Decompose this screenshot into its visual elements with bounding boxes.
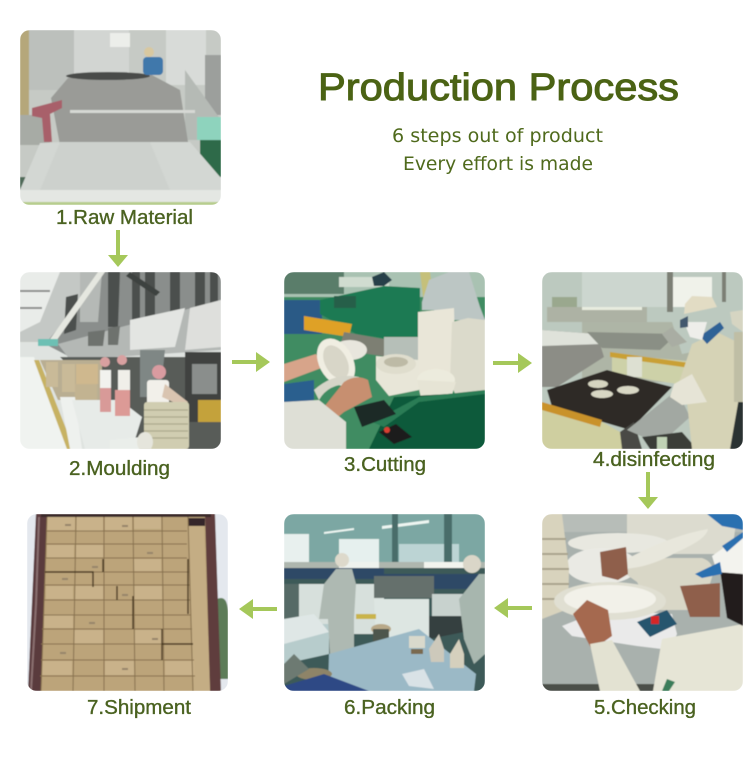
panel: step 7 shipment: [27, 514, 228, 719]
arrow: step 1 to 2: [108, 230, 128, 267]
arrow: step 3 to 4: [493, 353, 532, 373]
panel: step 4 disinfecting: [542, 272, 743, 471]
photo: cutting machine: [284, 272, 485, 449]
caption: 5.Checking: [594, 697, 696, 719]
subtitle text block: Every effort is made: [403, 153, 593, 175]
photo: disinfecting tunnel: [542, 272, 743, 449]
caption: 4.disinfecting: [593, 449, 715, 471]
panel: step 6 packing: [284, 514, 485, 719]
subtitle text block: [392, 125, 603, 175]
subtitle text block: 6 steps out of product: [392, 125, 603, 147]
panel: step 2 moulding: [20, 272, 221, 480]
photo: checking plates on scale: [542, 514, 743, 691]
arrow: step 6 to 7: [239, 599, 277, 619]
photo: container of cartons: [27, 514, 228, 691]
caption: 6.Packing: [344, 697, 435, 719]
photo: raw material machine: [20, 30, 221, 205]
photo: packing workshop: [284, 514, 485, 691]
caption: 7.Shipment: [87, 697, 191, 719]
arrow: step 4 to 5: [638, 472, 658, 509]
arrow: step 5 to 6: [494, 598, 532, 618]
panel: step 3 cutting: [284, 272, 485, 476]
arrow: step 2 to 3: [232, 352, 270, 372]
caption: 3.Cutting: [344, 454, 426, 476]
panel: step 1 raw material: [20, 30, 221, 229]
title: Production Process: [318, 67, 679, 109]
caption: 1.Raw Material: [56, 207, 193, 229]
panel: step 5 checking: [542, 514, 743, 719]
photo: moulding line: [20, 272, 221, 452]
caption: 2.Moulding: [69, 458, 170, 480]
